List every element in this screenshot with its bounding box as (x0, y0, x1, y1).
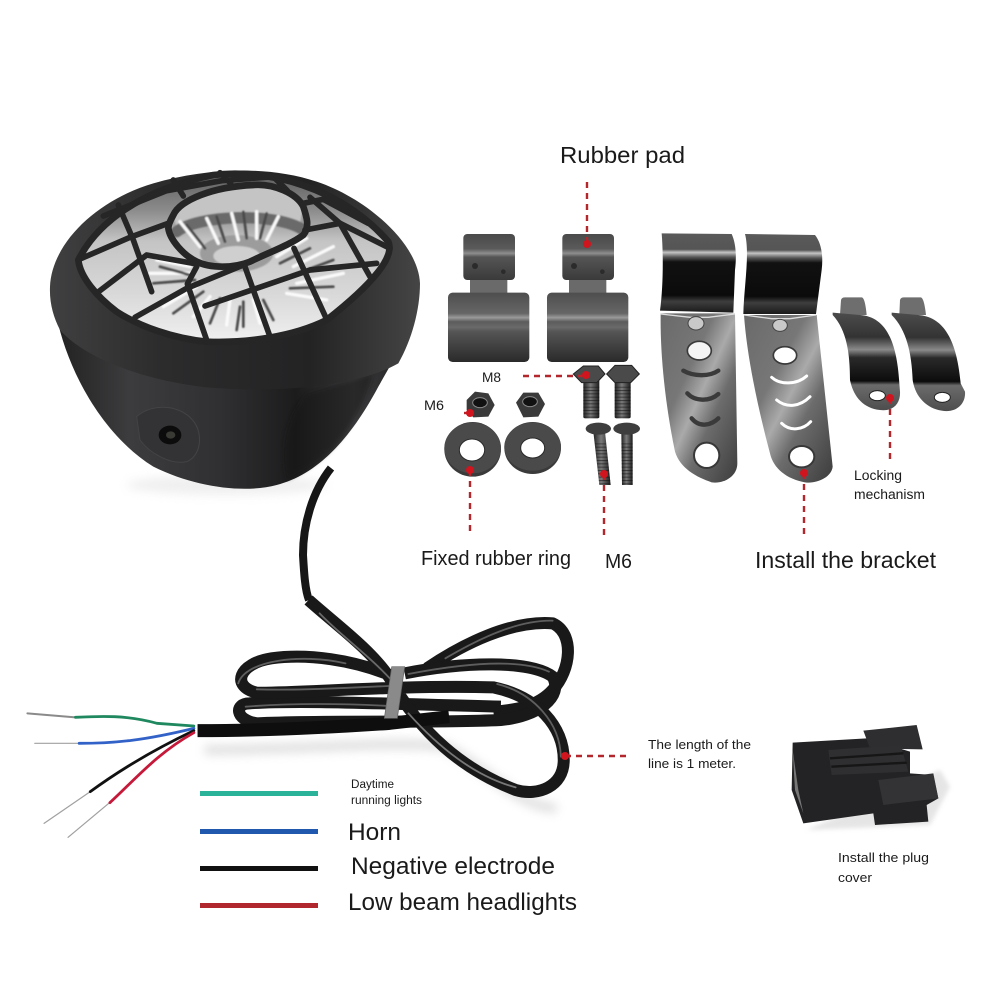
bracket right (743, 234, 833, 483)
label: M6 nut: M6 (424, 397, 444, 413)
lens inner reflector (150, 187, 343, 330)
M6 screws (586, 423, 640, 485)
M8 bolts (573, 365, 639, 418)
connector shadow (807, 770, 950, 830)
legend line: blue (200, 829, 318, 834)
connector ribs (828, 745, 908, 775)
label: install the plug cover: Install the plug (838, 850, 929, 865)
lamp body (57, 293, 419, 489)
label: install the bracket: Install the bracket (755, 547, 937, 573)
label: locking mechanism (854, 468, 925, 502)
legend label: daytime: Daytime (351, 779, 394, 791)
coloured conductors (75, 716, 194, 803)
grille (78, 173, 390, 342)
label: locking mechanism: mechanism (854, 487, 925, 502)
rubber pad right (547, 234, 628, 362)
label: M6 screw: M6 (605, 551, 632, 573)
icon: plug cover (792, 725, 950, 830)
wire bundle (27, 600, 568, 837)
rubber rings (444, 422, 561, 477)
legend (200, 779, 577, 916)
M6 nuts (467, 392, 545, 417)
rubber pad left (448, 234, 529, 362)
lens (78, 174, 388, 342)
legend line: black (200, 866, 318, 871)
icon: headlight lamp (50, 171, 420, 495)
cable highlights (238, 613, 561, 787)
label: M8: M8 (482, 369, 501, 385)
wire tips (27, 713, 109, 837)
legend label: horn: Horn (348, 819, 401, 846)
legend line: teal (200, 791, 318, 796)
legend label: running lights: running lights (351, 795, 422, 807)
connector front tab (878, 773, 938, 805)
locking clamp right (892, 297, 965, 411)
label: cable length: line is 1 meter. (648, 756, 736, 771)
rubber tie (384, 667, 405, 718)
label: install the plug cover (838, 850, 929, 885)
legend label: negative: Negative electrode (351, 853, 555, 880)
outer cable loops (198, 600, 568, 792)
locking clamp left (833, 297, 900, 410)
label: cable length: The length of the (648, 737, 751, 752)
cable shadow (205, 744, 556, 808)
lamp shadow (127, 475, 327, 495)
connector body (792, 738, 938, 825)
lamp body dark lobe (284, 373, 373, 480)
bracket left (660, 233, 737, 483)
label: fixed rubber ring: Fixed rubber ring (421, 548, 571, 570)
connector openings (793, 750, 803, 813)
rim (50, 171, 420, 389)
label: rubber pad: Rubber pad (560, 142, 685, 168)
label: locking mechanism: Locking (854, 468, 902, 483)
panel: rubber pads (444, 234, 640, 485)
connector top tab (863, 725, 923, 749)
mounting boss (137, 407, 200, 462)
mounting hole (159, 426, 181, 444)
cable from lamp (303, 468, 331, 600)
label: install the plug cover: cover (838, 870, 873, 885)
panel: brackets (660, 233, 965, 483)
legend label: low beam: Low beam headlights (348, 889, 577, 916)
label: cable length (648, 737, 751, 771)
callout leaders (464, 182, 890, 756)
callout dots (466, 240, 894, 760)
legend line: red (200, 903, 318, 908)
